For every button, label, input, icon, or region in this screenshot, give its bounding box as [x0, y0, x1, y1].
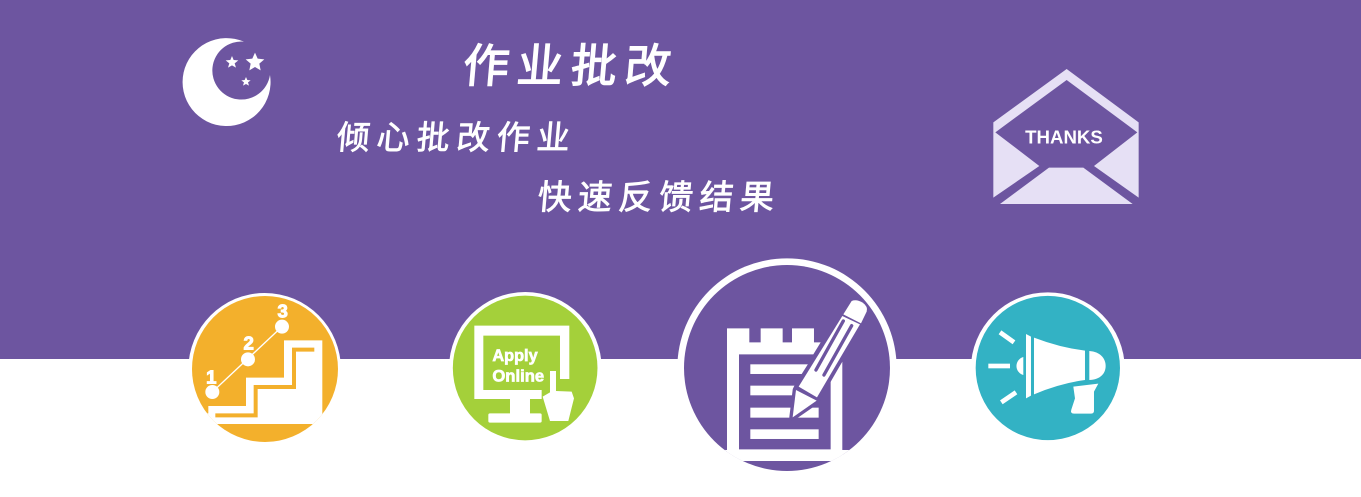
- icon badge: steps 1 2 3: [188, 293, 341, 446]
- envelope label: THANKS: [1025, 126, 1103, 147]
- icon badge: notepad and pencil: [670, 258, 905, 478]
- icon: crescent moon and stars: [183, 38, 271, 126]
- title: 作业批改: [461, 40, 681, 92]
- subtitle line 2: 快速反馈结果: [536, 179, 782, 217]
- icon badge: apply online: Apply: [492, 347, 538, 365]
- icon badge: apply online: Online: [492, 367, 544, 386]
- icon badge: steps 1 2 3: 1: [206, 366, 217, 387]
- icon badge: steps 1 2 3: 2: [243, 332, 254, 353]
- icon: open envelope with THANKS: [993, 69, 1139, 204]
- icon badge: steps 1 2 3: 3: [277, 300, 288, 321]
- subtitle line 1: 倾心批改作业: [335, 120, 578, 157]
- pencil: [793, 300, 867, 417]
- purple banner background: [0, 0, 1361, 359]
- icon badge: megaphone: [971, 292, 1125, 446]
- icon badge: apply online: [449, 292, 602, 445]
